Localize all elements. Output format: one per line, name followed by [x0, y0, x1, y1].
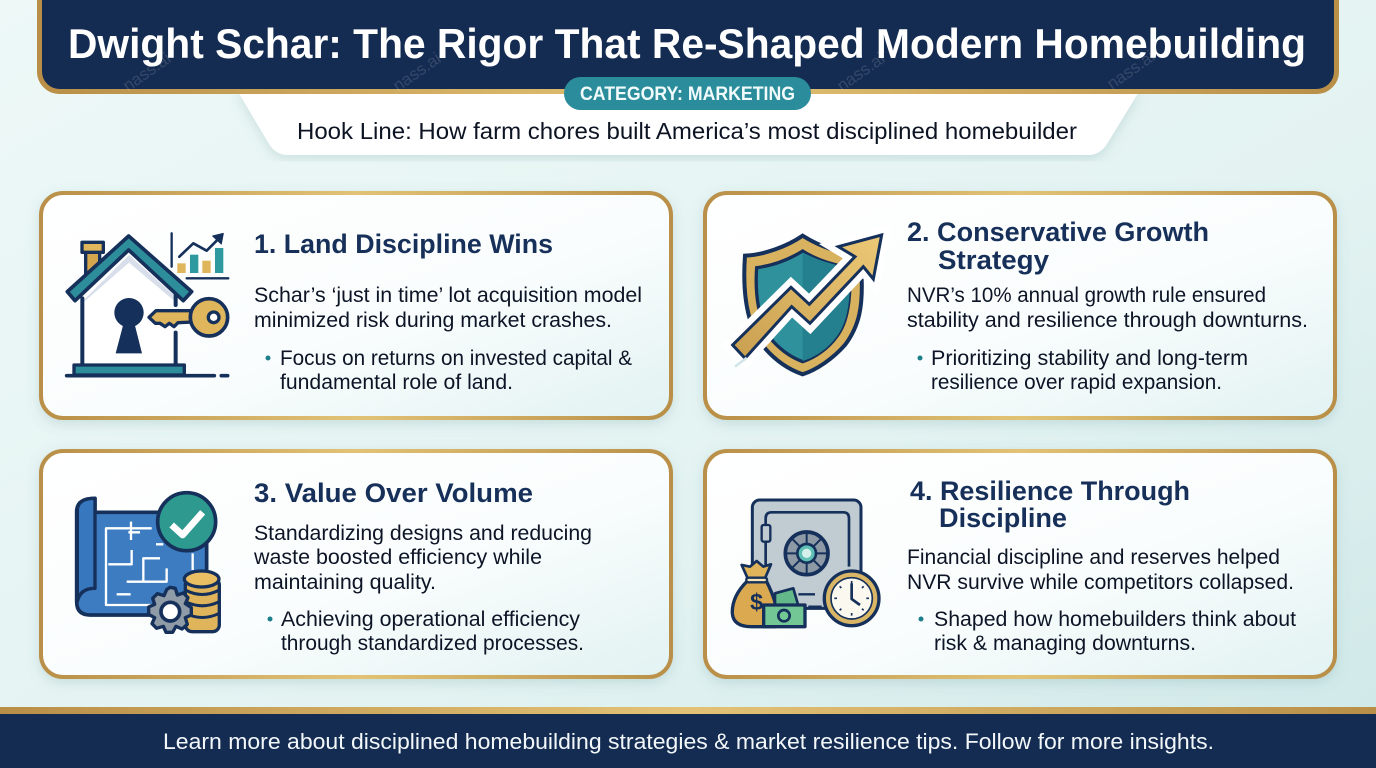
bullet: Shaped how homebuilders think about	[934, 607, 1296, 631]
footer text: Learn more about disciplined homebuilding strategies & market resilience tips. Follow for more insights.	[163, 729, 1214, 754]
bullet: Focus on returns on invested capital &	[280, 346, 632, 370]
heading: 4. Resilience Through	[910, 476, 1190, 506]
panel: value over volume	[41, 451, 671, 677]
header banner: nass.ai	[1103, 47, 1158, 93]
bullet	[918, 607, 1296, 655]
body text	[254, 283, 642, 332]
icon: safe, money and clock: $	[750, 589, 763, 615]
body text: stability and resilience through downturns.	[907, 308, 1308, 332]
body text: NVR’s 10% annual growth rule ensured	[907, 283, 1266, 307]
icon: blueprint, check, gear and coins	[77, 493, 219, 632]
body text: Standardizing designs and reducing	[254, 521, 592, 545]
body text	[907, 545, 1294, 594]
icon: house, key and chart	[67, 233, 228, 376]
bullet: resilience over rapid expansion.	[931, 370, 1222, 394]
body text: minimized risk during market crashes.	[254, 308, 612, 332]
title: Dwight Schar: The Rigor That Re-Shaped Modern Homebuilding	[68, 20, 1306, 67]
body text: maintaining quality.	[254, 570, 436, 594]
heading: 2. Conservative Growth	[907, 217, 1209, 247]
body text: Schar’s ‘just in time’ lot acquisition model	[254, 283, 642, 307]
panel: land discipline	[41, 193, 671, 418]
bullet: fundamental role of land.	[280, 370, 513, 394]
panel: conservative growth	[705, 193, 1335, 418]
heading	[907, 217, 1209, 275]
bullet: Prioritizing stability and long-term	[931, 346, 1248, 370]
header banner: nass.ai	[389, 49, 444, 95]
bullet: Achieving operational efficiency	[281, 607, 580, 631]
heading: 3. Value Over Volume	[254, 478, 533, 508]
heading: Strategy	[938, 245, 1049, 275]
category badge: CATEGORY: MARKETING	[580, 84, 795, 105]
bullet	[918, 346, 1248, 394]
header banner: nass.ai	[833, 49, 888, 95]
heading: 1. Land Discipline Wins	[254, 229, 553, 259]
bullet	[266, 346, 632, 394]
subtitle panel: hook line	[237, 90, 1140, 155]
header banner	[40, 0, 1336, 95]
body text: waste boosted efficiency while	[253, 545, 542, 569]
body text: NVR survive while competitors collapsed.	[907, 570, 1294, 594]
heading	[910, 476, 1190, 533]
body text	[253, 521, 592, 594]
bullet: through standardized processes.	[281, 631, 584, 655]
body text	[907, 283, 1308, 332]
header banner: nass.ai	[119, 49, 174, 95]
panel: resilience through discipline	[705, 451, 1335, 677]
icon: shield and arrow	[733, 235, 882, 374]
body text: Financial discipline and reserves helped	[907, 545, 1280, 569]
heading: Discipline	[939, 503, 1067, 533]
bullet	[268, 607, 584, 655]
category badge	[564, 77, 811, 110]
bullet: risk & managing downturns.	[934, 631, 1196, 655]
icon: safe, money and clock	[732, 500, 879, 627]
footer bar	[0, 707, 1376, 768]
hook line text: Hook Line: How farm chores built America’s most disciplined homebuilder	[297, 118, 1077, 144]
